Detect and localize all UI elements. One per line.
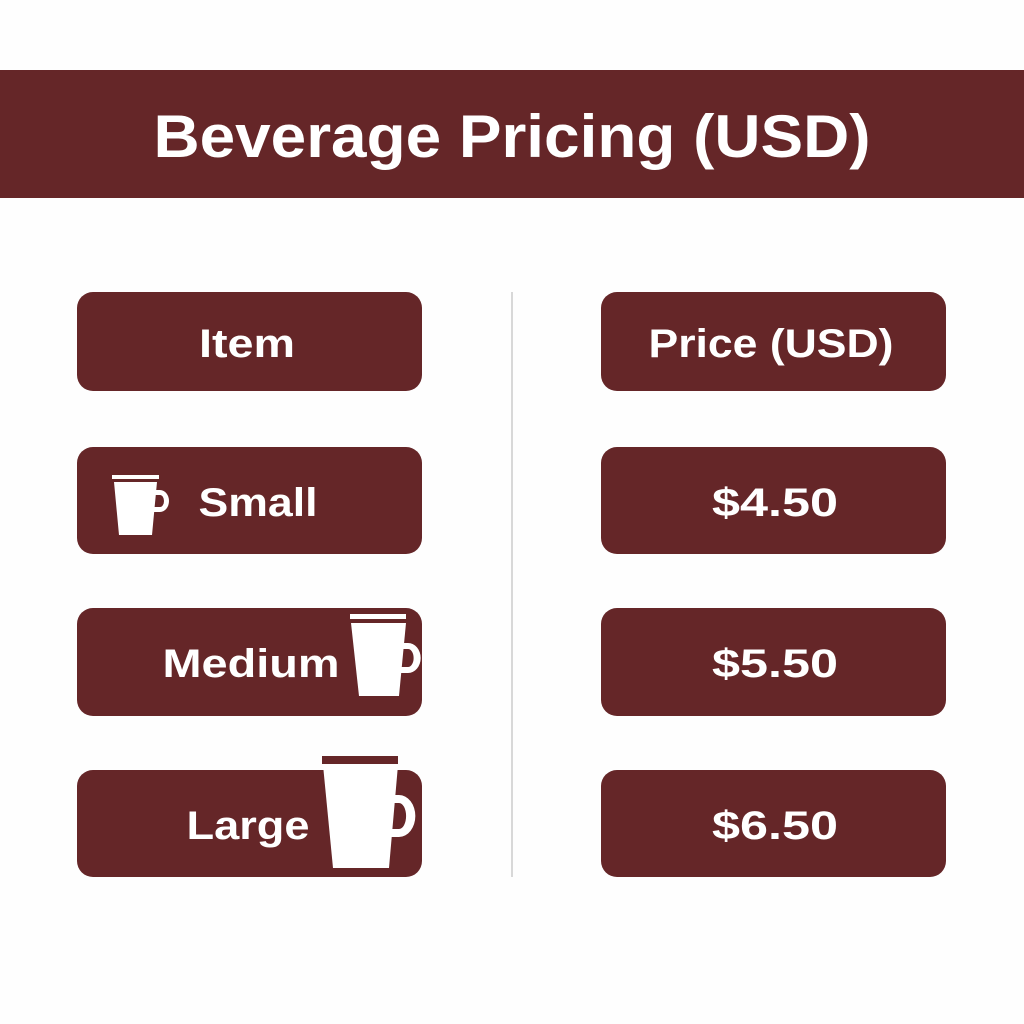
icon: large cup	[322, 756, 415, 868]
row: large price: $6.50	[712, 804, 838, 848]
row: medium	[77, 608, 422, 716]
icon: small cup	[112, 475, 169, 535]
header: item	[77, 292, 422, 391]
row: large: Large	[186, 804, 310, 848]
title: Beverage Pricing (USD)	[154, 103, 870, 170]
header: item: Item	[199, 322, 295, 366]
row: medium: Medium	[162, 642, 340, 686]
title banner	[0, 70, 1024, 198]
row: small	[77, 447, 422, 554]
header: price: Price (USD)	[648, 322, 894, 366]
row: small: Small	[198, 481, 318, 525]
row: large	[77, 756, 422, 877]
row: large price	[601, 770, 946, 877]
icon: medium cup	[350, 614, 421, 696]
row: medium price: $5.50	[712, 642, 838, 686]
row: small price: $4.50	[712, 481, 838, 525]
header: price	[601, 292, 946, 391]
row: small price	[601, 447, 946, 554]
row: medium price	[601, 608, 946, 716]
